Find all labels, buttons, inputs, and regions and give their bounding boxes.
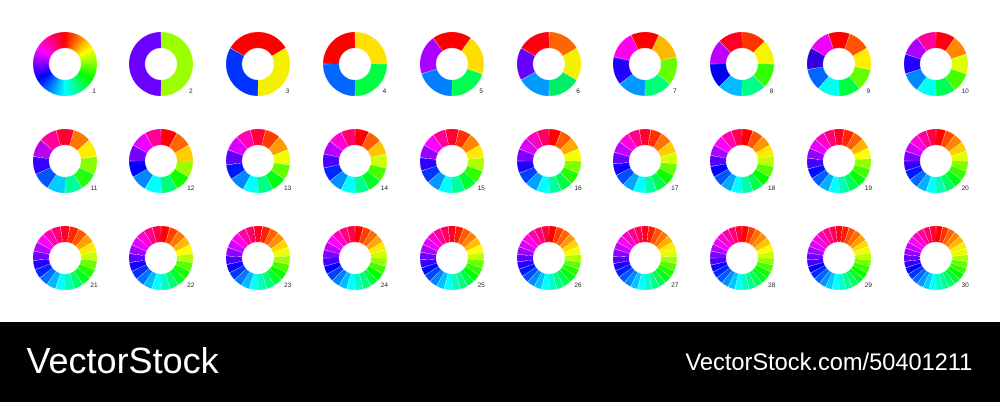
image id text: VectorStock.com/50401211 (686, 350, 972, 376)
donut chart 18: 18 (768, 185, 775, 192)
donut chart 20 (904, 129, 969, 193)
donut chart 30 (904, 226, 969, 290)
donut chart 19: 19 (865, 185, 872, 192)
donut chart 2 (129, 32, 193, 96)
donut chart 8: 8 (770, 88, 773, 95)
donut chart 22: 22 (187, 282, 194, 289)
donut chart 23: 23 (284, 282, 291, 289)
donut chart 4 (323, 32, 387, 96)
donut chart 7 (613, 32, 677, 96)
donut chart 26 (517, 226, 582, 290)
donut chart 5: 5 (479, 88, 483, 95)
donut chart 6: 6 (576, 88, 580, 95)
donut chart 28 (710, 226, 775, 290)
footer band (0, 322, 1000, 402)
donut chart 12: 12 (187, 185, 194, 192)
donut chart 24: 24 (381, 282, 388, 289)
donut chart 26: 26 (574, 282, 582, 289)
donut chart 10 (904, 32, 969, 96)
donut chart 28: 28 (768, 282, 775, 289)
donut chart 23 (226, 226, 291, 290)
donut chart 20: 20 (962, 185, 969, 192)
donut chart 18 (710, 129, 775, 193)
donut chart 1: continuous gradient (33, 32, 97, 96)
donut chart 2: 2 (189, 88, 193, 95)
donut chart 27: 27 (671, 282, 678, 289)
donut chart 25: 25 (478, 282, 485, 289)
donut chart 9: 9 (867, 88, 870, 95)
donut chart 29 (807, 226, 872, 290)
donut chart 10: 10 (962, 88, 969, 95)
donut chart 3: 3 (286, 88, 289, 95)
donut chart 19 (807, 129, 872, 193)
donut chart 17: 17 (671, 185, 678, 192)
donut chart 15 (420, 129, 485, 193)
donut chart 13: 13 (284, 185, 291, 192)
donut chart 29: 29 (865, 282, 872, 289)
donut chart 25 (420, 226, 485, 290)
donut chart 21 (33, 226, 98, 290)
donut chart 16: 16 (574, 185, 582, 192)
donut chart 17 (613, 129, 678, 193)
donut chart 30: 30 (962, 282, 969, 289)
donut chart 13 (226, 129, 291, 193)
donut chart 11 (33, 129, 98, 193)
donut chart 8 (710, 32, 774, 96)
donut chart 15: 15 (478, 185, 485, 192)
brand wordmark: VectorStock (26, 340, 219, 380)
donut chart 5 (420, 32, 484, 96)
donut chart 9 (807, 32, 871, 96)
donut chart 22 (129, 226, 194, 290)
donut chart 24 (323, 226, 388, 290)
donut chart 11: 11 (91, 185, 97, 192)
donut chart 14 (323, 129, 388, 193)
donut chart 14: 14 (381, 185, 388, 192)
donut chart 12 (129, 129, 194, 193)
donut chart 1: continuous gradient: 1 (92, 88, 96, 95)
donut chart 21: 21 (90, 282, 98, 289)
donut chart 3 (226, 32, 290, 96)
donut chart 7: 7 (673, 88, 677, 95)
donut chart 6 (517, 32, 581, 96)
donut chart 16 (517, 129, 582, 193)
donut chart 27 (613, 226, 678, 290)
donut chart 4: 4 (383, 88, 386, 95)
